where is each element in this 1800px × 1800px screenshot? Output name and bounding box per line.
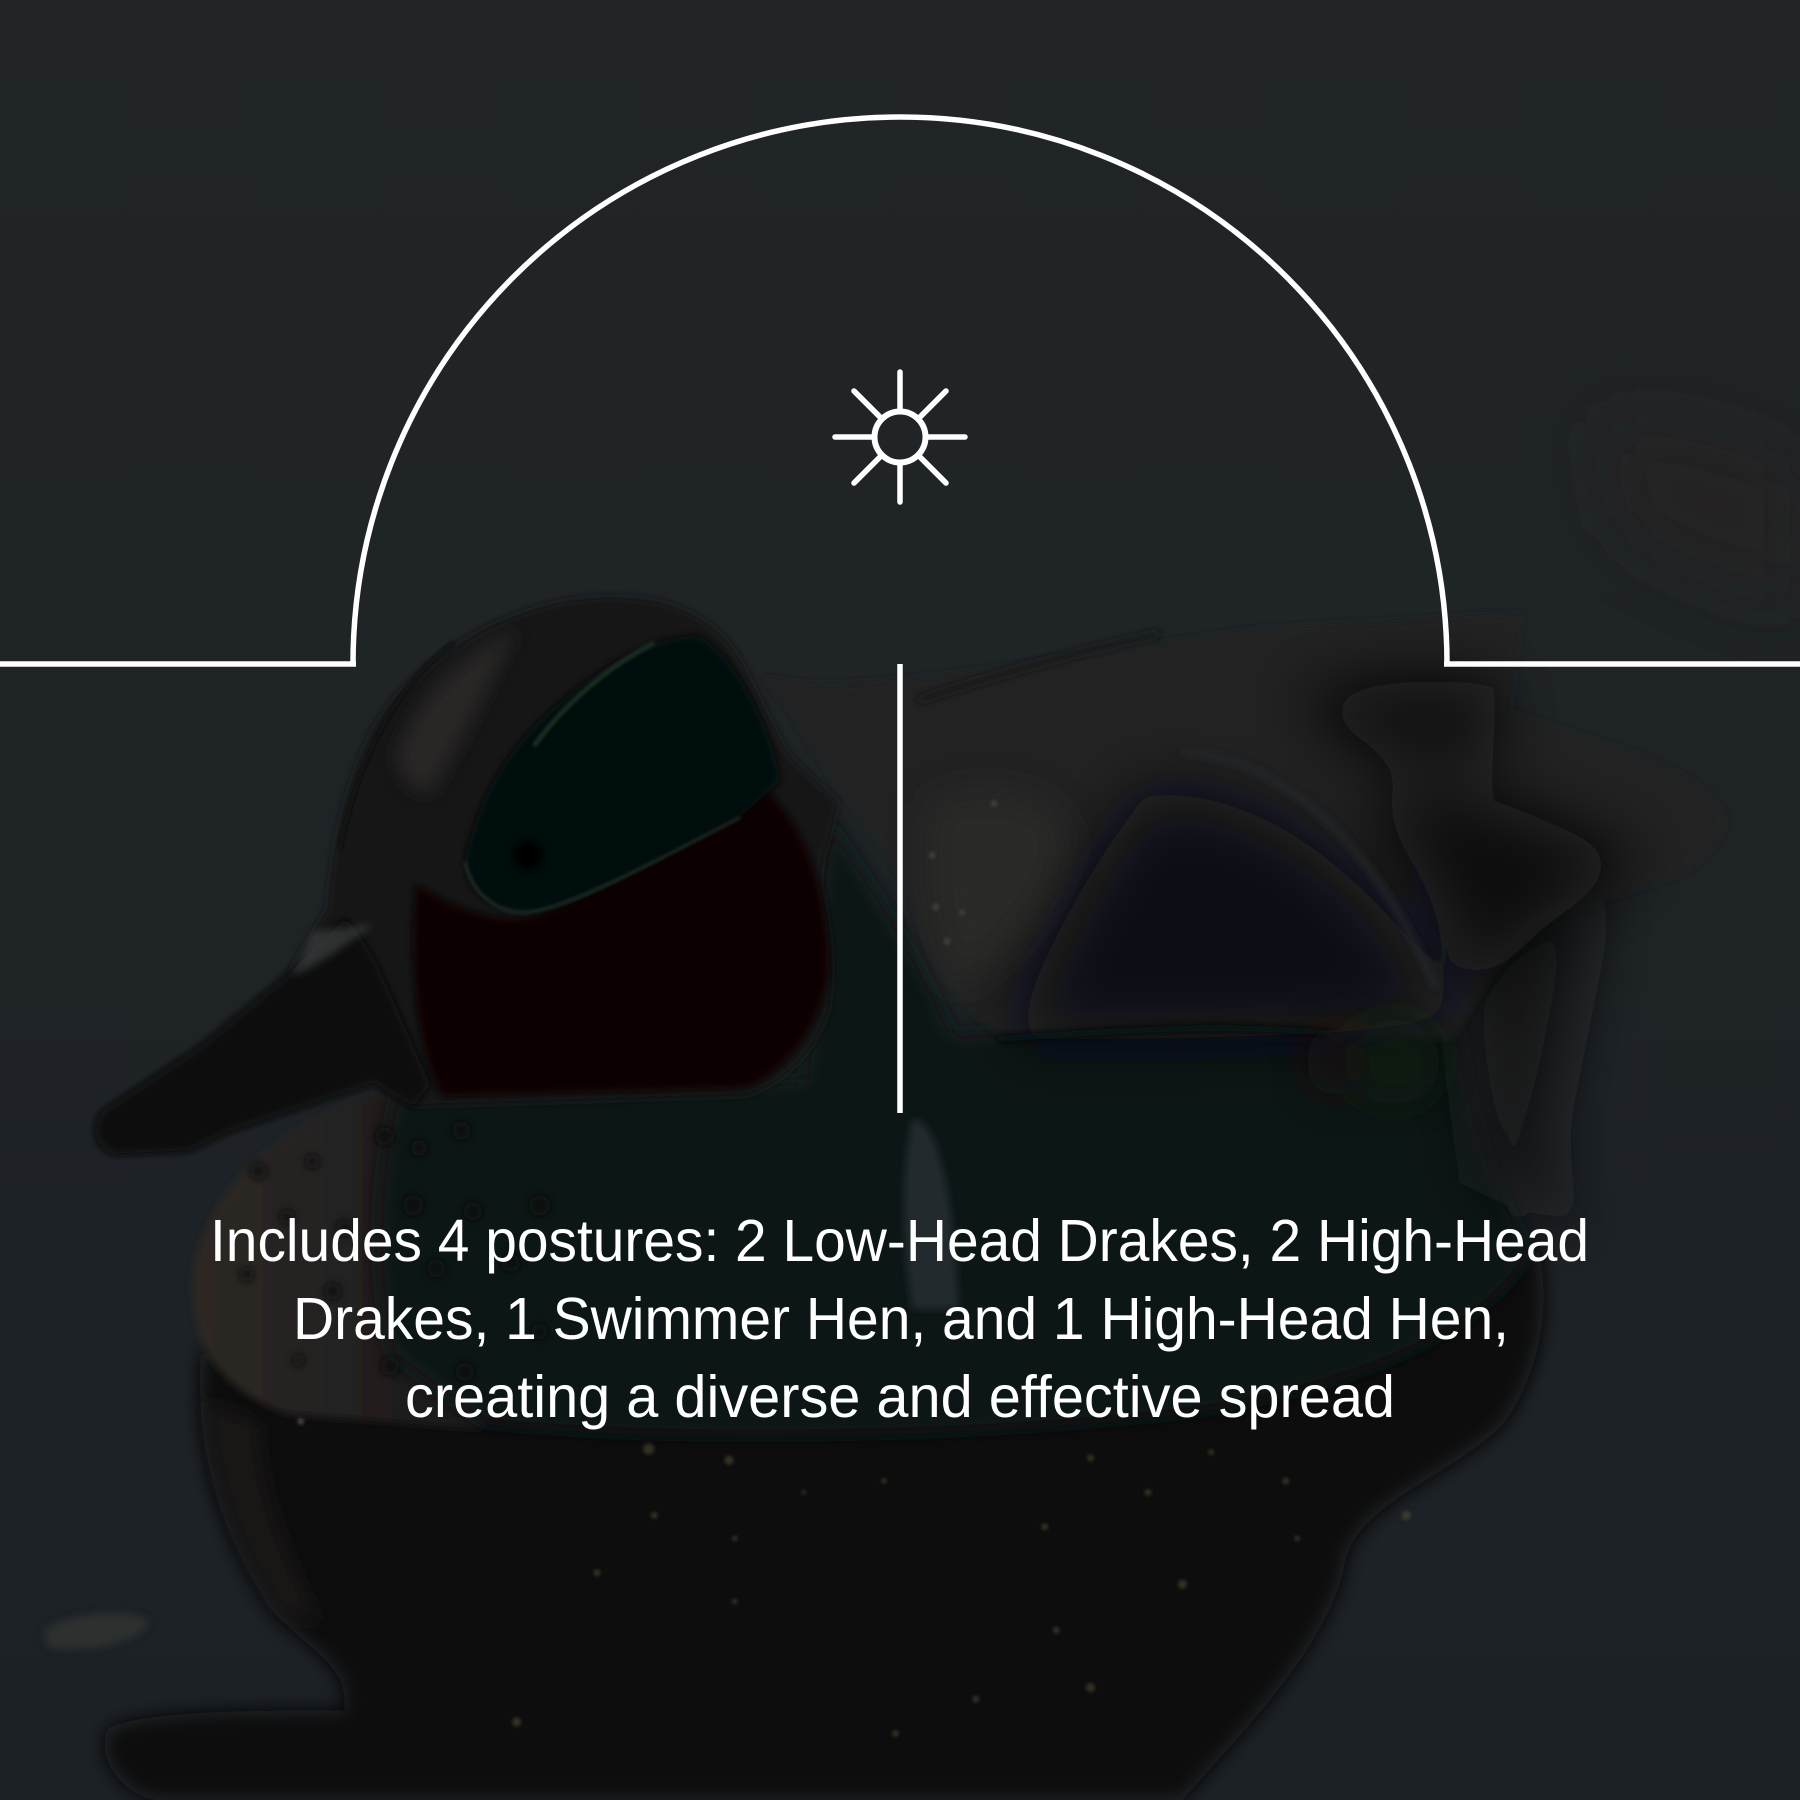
right baseline rule <box>1444 661 1800 667</box>
semicircle arch <box>353 117 1447 666</box>
duck: lit feathers on shoulder <box>925 792 1068 987</box>
duck: head <box>96 597 838 1154</box>
duck: shoulder speckles <box>929 800 998 945</box>
icon: sun <box>835 372 965 502</box>
duck: side body <box>377 815 1533 1436</box>
duck: breast spots <box>240 1122 550 1381</box>
left baseline rule <box>0 661 356 667</box>
red cheek <box>413 792 829 1096</box>
duck: tail and rear flank <box>1458 890 1596 1228</box>
eye <box>513 840 543 870</box>
duck: breast <box>193 1091 551 1429</box>
caption text: creating a diverse and effective spread <box>405 1364 1395 1430</box>
crown ridge line <box>340 643 453 850</box>
duck: back and wing <box>763 614 1725 1039</box>
floating debris <box>44 1613 149 1649</box>
duck: wing crease lines <box>918 634 1435 1039</box>
duck: dark wing folds <box>1010 681 1642 1039</box>
distant shore smudge <box>1596 422 1800 603</box>
crown highlight <box>396 629 517 792</box>
bill highlight <box>293 924 373 976</box>
eye patch outline <box>465 817 740 913</box>
photo: duck decoy on water <box>44 422 1800 1800</box>
green eye patch <box>465 636 781 912</box>
bill <box>96 918 430 1154</box>
duck: pale feather behind divider <box>904 1119 959 1309</box>
caption text <box>210 1208 1589 1430</box>
caption text: Includes 4 postures: 2 Low-Head Drakes, 2 High-Head <box>210 1208 1589 1274</box>
vertical divider <box>897 664 903 1113</box>
caption text: Drakes, 1 Swimmer Hen, and 1 High-Head Hen, <box>293 1286 1509 1352</box>
reflection on water <box>104 1251 1544 1800</box>
head silhouette <box>96 597 838 1154</box>
duck: speculum colour patch <box>1306 1018 1441 1106</box>
green sheen <box>534 643 654 746</box>
ripple highlights near waterline <box>293 1386 356 1425</box>
